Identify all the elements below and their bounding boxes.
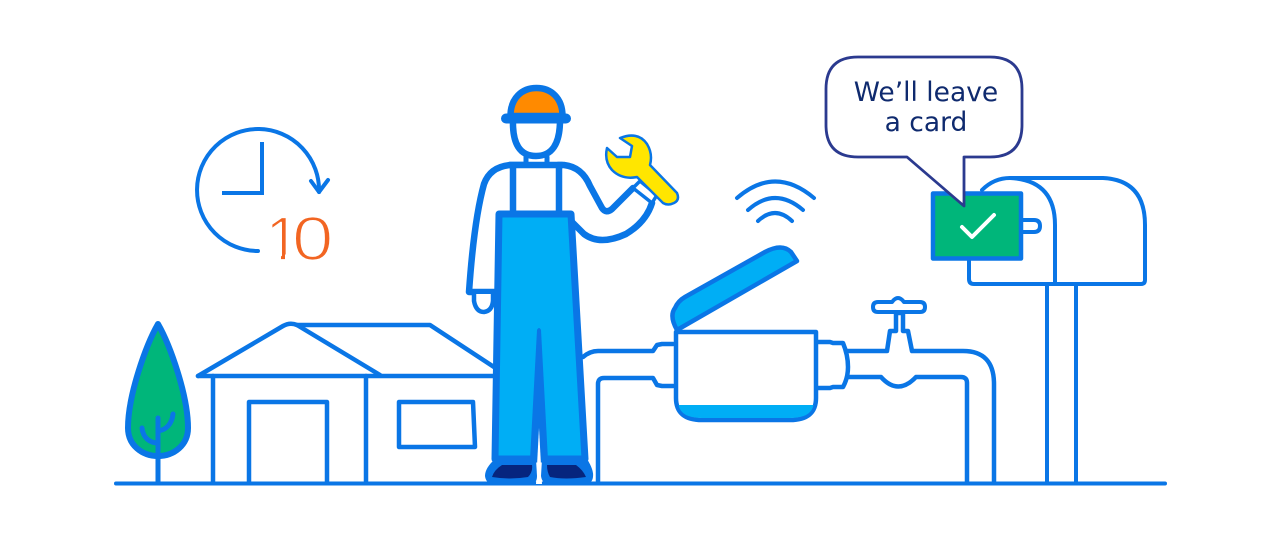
face xyxy=(513,120,560,156)
right arm xyxy=(558,165,652,240)
water meter xyxy=(672,248,816,420)
neck and chest xyxy=(513,156,559,214)
helmet brim xyxy=(506,114,566,124)
icon: wifi signal xyxy=(737,182,814,221)
leg seam xyxy=(530,328,548,460)
number ten: 0 xyxy=(292,204,333,274)
number ten: 1 xyxy=(266,205,300,274)
overalls xyxy=(495,214,585,459)
speech bubble xyxy=(826,57,1022,206)
icon: tree xyxy=(128,324,188,483)
icon: mailbox xyxy=(969,178,1145,483)
water pipe xyxy=(583,313,994,483)
wrench xyxy=(606,136,678,204)
helmet xyxy=(510,88,562,116)
icon: valve handle xyxy=(873,298,925,312)
gap between legs xyxy=(536,428,542,484)
number ten xyxy=(264,204,333,274)
wrist cuff xyxy=(633,181,657,203)
card with check mark xyxy=(933,194,1021,258)
meter water xyxy=(678,405,814,418)
worker figure xyxy=(469,88,678,485)
bubble text: We’ll leave xyxy=(854,77,998,108)
icon: clock with arrow xyxy=(197,129,333,274)
hand xyxy=(474,294,493,312)
bubble text: a card xyxy=(885,107,967,138)
left shoe xyxy=(485,459,537,485)
meter body xyxy=(676,332,816,420)
ground line xyxy=(116,482,1165,486)
icon: house xyxy=(198,324,497,483)
left arm xyxy=(469,165,526,292)
right shoe xyxy=(541,459,593,485)
meter lid xyxy=(672,248,797,330)
